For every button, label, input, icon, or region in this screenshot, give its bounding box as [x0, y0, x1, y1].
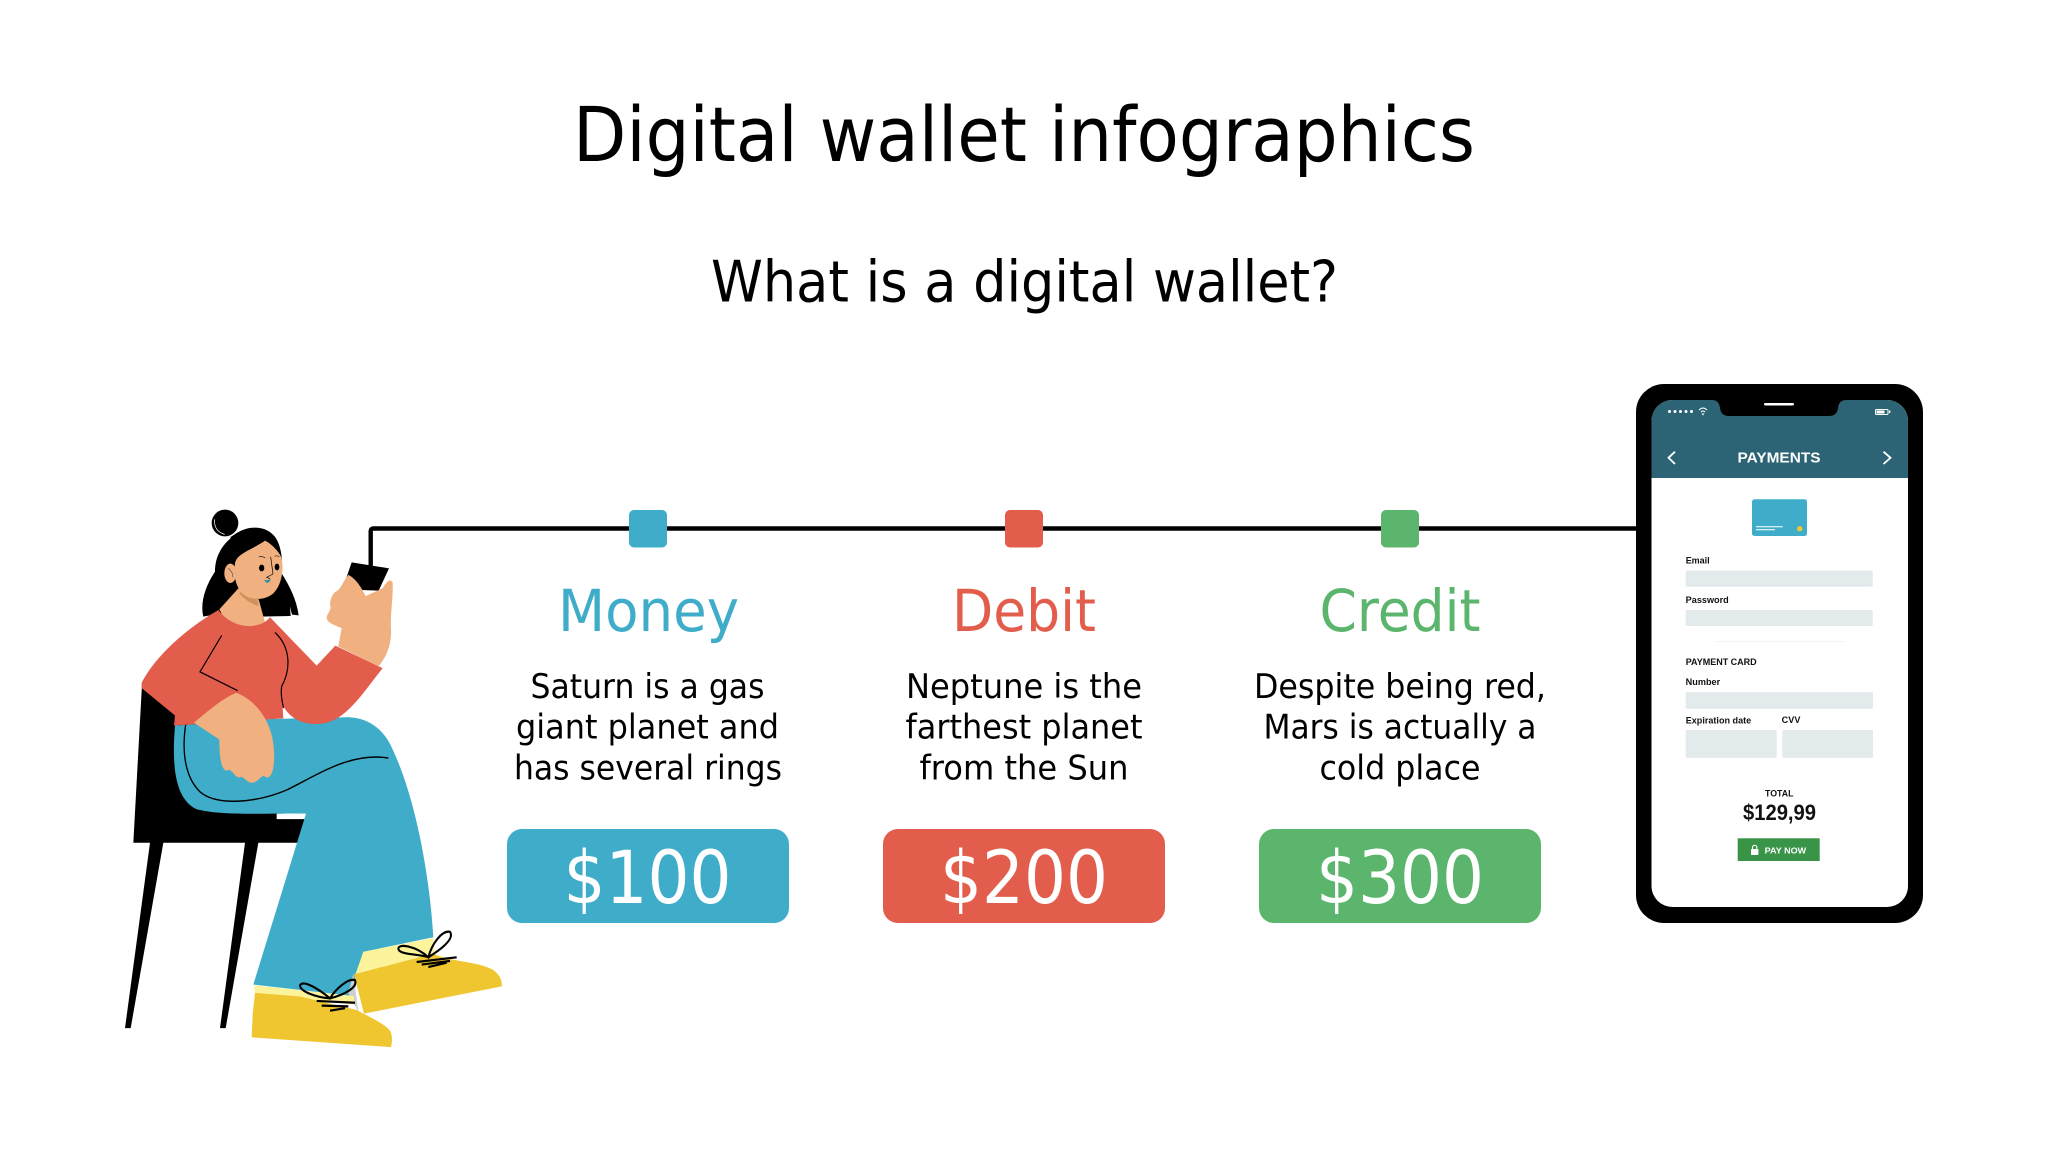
payment card form: PAYMENT CARD — [1686, 657, 1757, 667]
description: money — [514, 667, 782, 787]
marker: debit — [1005, 510, 1043, 548]
description: money: has several rings — [514, 748, 782, 787]
shoes — [355, 938, 434, 975]
head and hair — [201, 510, 299, 628]
description: debit — [906, 667, 1142, 787]
total — [1743, 789, 1816, 825]
panel: money — [507, 510, 789, 923]
shirt — [142, 610, 383, 726]
illustration: woman sitting on chair using phone — [125, 510, 502, 1047]
payment card form: CVV — [1782, 715, 1800, 725]
app header — [1652, 400, 1908, 478]
raised hand — [327, 575, 393, 666]
total: TOTAL — [1765, 789, 1794, 799]
price button: money: $100 — [564, 836, 732, 921]
payment card form: Number — [1686, 677, 1721, 687]
price button: debit: $200 — [940, 836, 1108, 921]
notch — [1712, 400, 1846, 416]
arm and resting hand — [194, 693, 274, 783]
login form — [1686, 555, 1873, 626]
shoe laces — [398, 932, 457, 967]
panel: credit — [1254, 510, 1546, 923]
description: money: Saturn is a gas — [530, 667, 764, 706]
pay now button — [1738, 838, 1820, 861]
description: debit: Neptune is the — [906, 667, 1142, 706]
speaker — [1764, 403, 1794, 406]
price button: credit: $300 — [1316, 836, 1484, 921]
description: credit: Despite being red, — [1254, 667, 1546, 706]
chair — [125, 685, 313, 1028]
description: credit: Mars is actually a — [1264, 708, 1536, 747]
description: debit: from the Sun — [920, 748, 1128, 787]
subtitle: What is a digital wallet? — [711, 250, 1338, 316]
marker: money — [629, 510, 667, 548]
payment card form — [1686, 641, 1873, 758]
price button: debit — [883, 829, 1165, 923]
pay now button: PAY NOW — [1765, 845, 1807, 855]
heading: credit: Credit — [1320, 578, 1480, 645]
price button: money — [507, 829, 789, 923]
header label and arrows — [1668, 450, 1890, 466]
header label and arrows: PAYMENTS — [1738, 450, 1820, 466]
status icons — [1668, 408, 1890, 416]
marker: credit — [1381, 510, 1419, 548]
screen — [1652, 400, 1908, 907]
description: debit: farthest planet — [906, 708, 1142, 747]
description: credit: cold place — [1320, 748, 1480, 787]
price button: credit — [1259, 829, 1541, 923]
trousers and body — [142, 575, 502, 1047]
heading: money: Money — [558, 578, 739, 645]
phone held in hand — [342, 562, 389, 591]
description: money: giant planet and — [516, 708, 779, 747]
payment card form: Expiration date — [1686, 716, 1751, 726]
heading: debit: Debit — [952, 578, 1096, 645]
login form: Password — [1686, 595, 1729, 605]
total: $129,99 — [1743, 800, 1816, 825]
title: Digital wallet infographics — [573, 90, 1475, 179]
phone mockup — [1636, 384, 1923, 923]
connector line from phone to phone — [371, 528, 1640, 566]
phone body — [1636, 384, 1923, 923]
icon: payment card — [1752, 499, 1807, 536]
login form: Email — [1686, 555, 1710, 565]
description: credit — [1254, 667, 1546, 787]
panel: debit — [883, 510, 1165, 923]
